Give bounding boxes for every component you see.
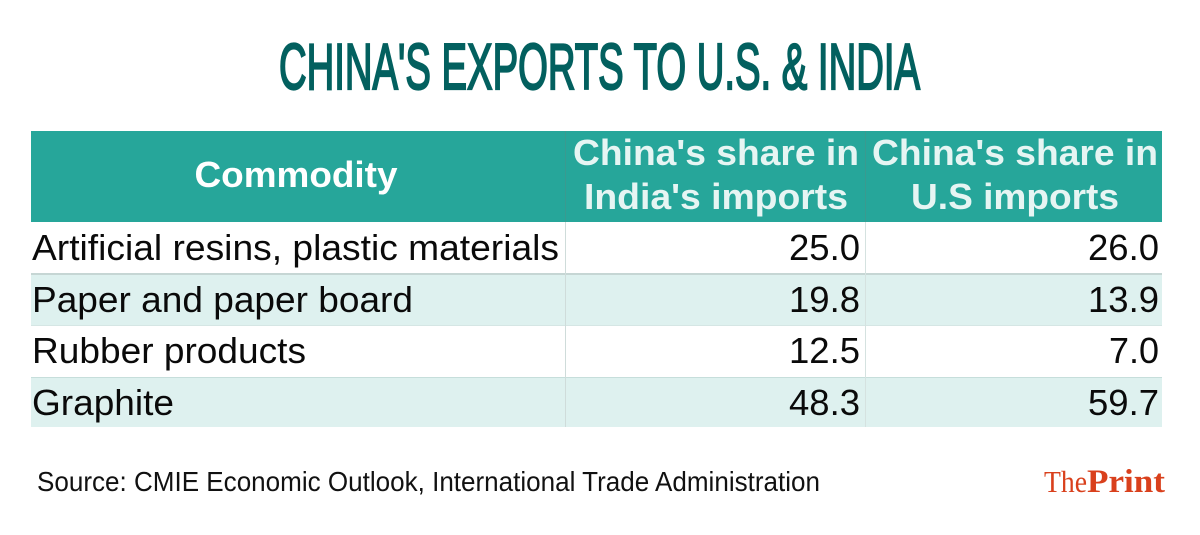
row: artificial resins	[31, 222, 1162, 274]
row: graphite: 59.7	[1088, 382, 1159, 423]
row: rubber products: 7.0	[1109, 330, 1159, 371]
table header row: India's imports	[584, 176, 848, 217]
logo: ThePrint: The	[1044, 464, 1087, 499]
table header row	[31, 131, 1162, 222]
row: graphite	[31, 378, 1162, 427]
row: artificial resins: 26.0	[1088, 227, 1159, 268]
table header row: U.S imports	[911, 176, 1119, 217]
row: paper and paper board: 13.9	[1088, 279, 1159, 320]
logo: ThePrint	[1044, 464, 1165, 500]
row: graphite: Graphite	[32, 382, 174, 423]
logo: ThePrint: Print	[1087, 464, 1165, 500]
row: artificial resins: Artificial resins, plastic materials	[32, 227, 559, 268]
table header row: China's share in	[573, 132, 859, 173]
row: paper and paper board: Paper and paper board	[32, 279, 413, 320]
table header row: China's share in	[872, 132, 1158, 173]
row: graphite: 48.3	[789, 382, 860, 423]
row: paper and paper board	[31, 274, 1162, 326]
data table	[31, 131, 1162, 427]
source note: Source: CMIE Economic Outlook, International Trade Administration	[37, 466, 820, 497]
row: rubber products: 12.5	[789, 330, 860, 371]
row: artificial resins: 25.0	[789, 227, 860, 268]
row: rubber products	[31, 326, 1162, 378]
row: paper and paper board: 19.8	[789, 279, 860, 320]
row: rubber products: Rubber products	[32, 330, 306, 371]
table header row: Commodity	[194, 154, 398, 195]
